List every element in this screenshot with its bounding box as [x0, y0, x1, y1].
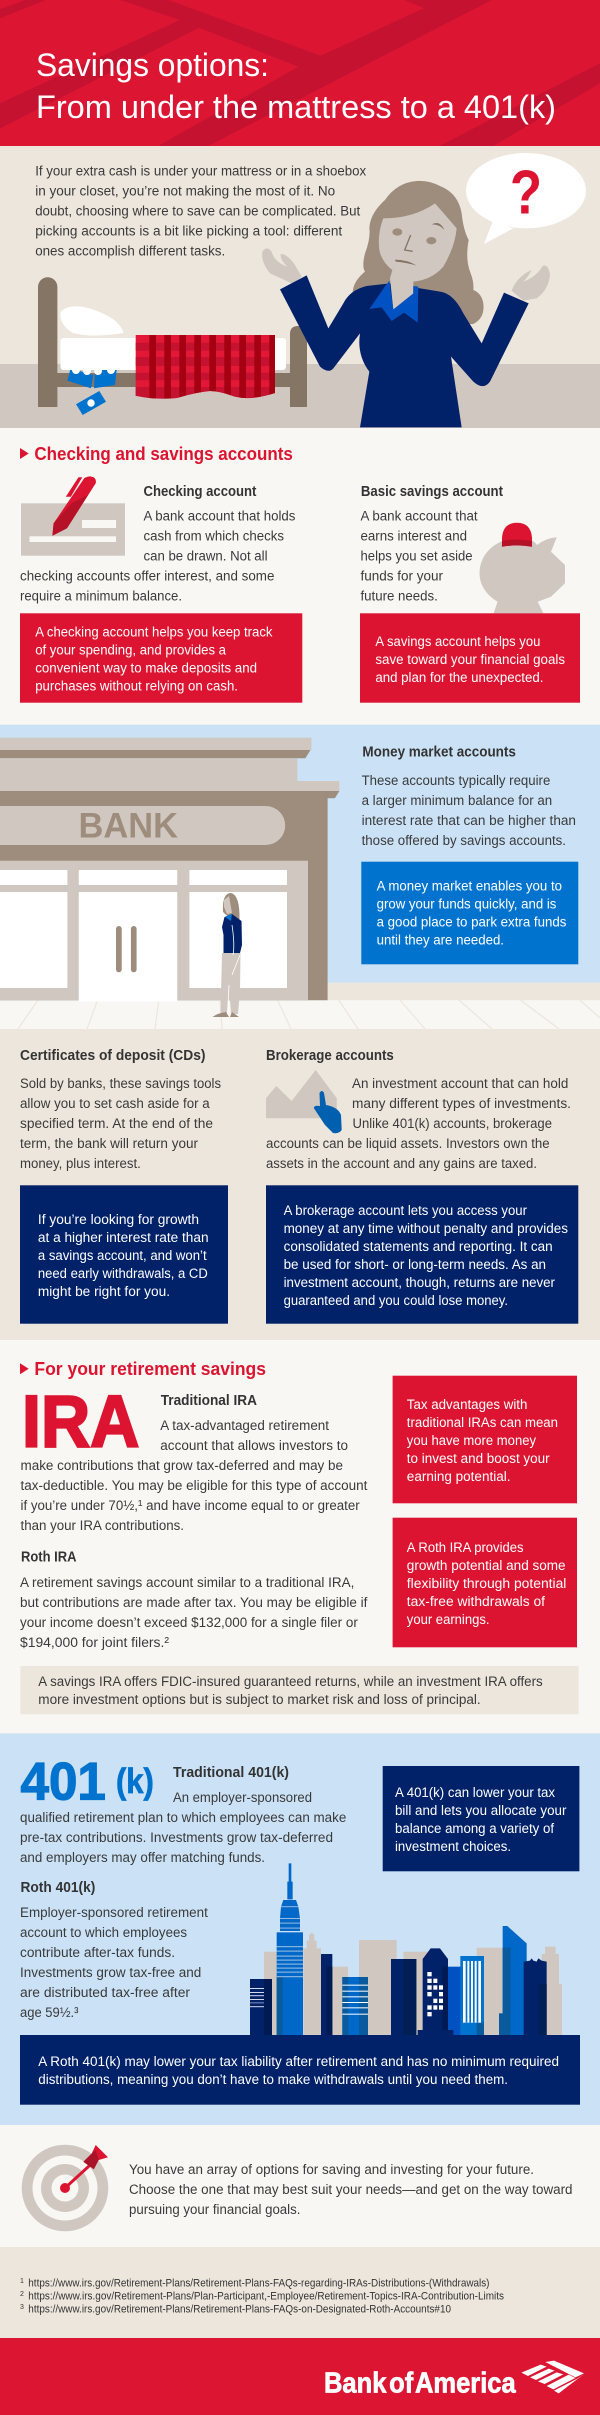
callout: traditional IRA: traditional IRAs can mean: [407, 1415, 558, 1431]
heading: traditional IRA: Traditional IRA: [161, 1393, 257, 1409]
intro text: If your extra cash is under your mattress or in a shoebox: [35, 164, 366, 180]
callout: consolidated statements and reporting. It can: [284, 1239, 553, 1255]
description: Roth 401(k): Investments grow tax-free and: [20, 1965, 201, 1981]
description: traditional IRA: make contributions that grow tax-deferred and may be: [20, 1458, 343, 1474]
panel: footnotes: https://www.irs.gov/Retirement-Plans/Retirement-Plans-FAQs-regarding-IRAs-Distributions-(Withdrawals): [28, 2278, 490, 2290]
description: Sold by banks, these savings tools: [20, 1076, 221, 1092]
description: require a minimum balance.: [20, 589, 182, 605]
description: traditional IRA: than your IRA contributions.: [20, 1518, 184, 1534]
panel: basic savings account: [360, 484, 580, 703]
panel: footnotes: 1: [20, 2278, 24, 2285]
callout: A savings account helps you: [375, 634, 540, 650]
description: [266, 1076, 571, 1172]
description: cash from which checks: [144, 529, 284, 545]
icon: flag mark: [521, 2361, 584, 2393]
description: those offered by savings accounts.: [362, 833, 566, 849]
panel: footnotes: [0, 2247, 600, 2338]
callout: traditional IRA: [393, 1376, 577, 1503]
panel: intro scene: [0, 146, 600, 428]
description: Unlike 401(k) accounts, brokerage: [352, 1116, 552, 1132]
description: [362, 773, 576, 849]
description: traditional 401(k): qualified retirement plan to which employees can make: [20, 1810, 346, 1826]
illustration: bank building: [0, 738, 339, 1002]
callout: If you’re looking for growth: [38, 1212, 199, 1228]
intro text: doubt, choosing where to save can be complicated. But: [35, 204, 360, 220]
heading: Checking account: [144, 484, 257, 500]
description: traditional IRA: [20, 1418, 367, 1534]
description: interest rate that can be higher than: [362, 813, 576, 829]
callout: a good place to park extra funds: [377, 915, 566, 931]
callout: purchases without relying on cash.: [35, 679, 238, 695]
callout: traditional IRA: you have more money: [407, 1433, 537, 1449]
description: An investment account that can hold: [352, 1076, 568, 1092]
callout: Roth 401(k): A Roth 401(k) may lower your tax liability after retirement and has no minimum required: [38, 2054, 559, 2070]
callout: A money market enables you to: [377, 879, 562, 895]
heading: Money market accounts: [362, 745, 516, 761]
heading: Basic savings account: [361, 484, 503, 500]
callout: traditional IRA: to invest and boost your: [407, 1451, 550, 1467]
description: traditional 401(k): pre-tax contributions. Investments grow tax-deferred: [20, 1830, 333, 1846]
bed illustration: [38, 277, 307, 415]
callout: traditional IRA: earning potential.: [407, 1469, 510, 1485]
description: Roth 401(k): account to which employees: [20, 1925, 187, 1941]
description: many different types of investments.: [352, 1096, 571, 1112]
description: traditional 401(k): and employers may offer matching funds.: [20, 1850, 265, 1866]
callout: [20, 613, 302, 703]
callout: convenient way to make deposits and: [35, 661, 257, 677]
icon: check and pen: [21, 476, 125, 556]
panel: checking account: [20, 476, 302, 703]
callout: Roth IRA: growth potential and some: [407, 1558, 566, 1574]
icon: mountain chart and pointing hand: [266, 1070, 342, 1133]
callout: 401(k): balance among a variety of: [395, 1821, 554, 1837]
note: savings vs investment IRA: [20, 1666, 579, 1714]
description: traditional 401(k): An employer-sponsored: [173, 1790, 312, 1806]
callout: investment account, though, returns are never: [284, 1275, 555, 1291]
description: [20, 509, 295, 605]
note: savings vs investment IRA: more investment options but is subject to market risk and loss of principal.: [38, 1692, 481, 1708]
intro text: [35, 164, 366, 260]
description: traditional IRA: A tax-advantaged retirement: [160, 1418, 329, 1434]
callout: [266, 1185, 578, 1324]
callout: guaranteed and you could lose money.: [284, 1293, 508, 1309]
panel: footnotes: 2: [20, 2291, 24, 2298]
callout: Roth IRA: your earnings.: [407, 1612, 490, 1628]
heading: Roth 401(k): Roth 401(k): [20, 1880, 95, 1896]
heading: traditional 401(k): Traditional 401(k): [173, 1765, 289, 1781]
intro text: in your closet, you’re not making the most of it. No: [35, 184, 335, 200]
description: helps you set aside: [360, 549, 473, 565]
speech bubble with question mark: [466, 153, 586, 244]
section heading: checking and savings: Checking and savings accounts: [34, 443, 293, 464]
speech bubble with question mark: ?: [510, 158, 542, 227]
description: assets in the account and any gains are taxed.: [266, 1156, 537, 1172]
description: funds for your: [360, 569, 443, 585]
401(k) wordmark: [20, 1752, 154, 1812]
callout: until they are needed.: [377, 933, 504, 949]
description: traditional IRA: account that allows investors to: [160, 1438, 348, 1454]
title: Savings options:: [36, 47, 269, 83]
description: specified term. At the end of the: [20, 1116, 213, 1132]
description: [20, 1076, 221, 1172]
logo: Bank of America: [324, 2361, 584, 2399]
logo: Bank of America: Bank of America: [324, 2367, 516, 2399]
callout: 401(k): A 401(k) can lower your tax: [395, 1785, 555, 1801]
footer: [0, 2338, 600, 2415]
callout: [361, 862, 578, 964]
callout: [360, 613, 580, 703]
callout: A brokerage account lets you access your: [284, 1203, 527, 1219]
heading: Certificates of deposit (CDs): [20, 1048, 206, 1064]
description: traditional IRA: tax-deductible. You may be eligible for this type of account: [20, 1478, 367, 1494]
panel: certificates of deposit: [20, 1048, 228, 1324]
panel: footnotes: https://www.irs.gov/Retirement-Plans/Plan-Participant,-Employee/Retirement-Topics-IRA-Contribution-Limits: [28, 2291, 504, 2303]
illustration: woman at the bank: [212, 893, 242, 1017]
section heading: retirement savings: For your retirement savings: [34, 1358, 266, 1379]
panel: closing message: [22, 2145, 572, 2231]
description: [360, 509, 478, 605]
blanket: [135, 335, 276, 405]
description: earns interest and: [360, 529, 467, 545]
description: These accounts typically require: [362, 773, 550, 789]
description: Roth 401(k): Employer-sponsored retirement: [20, 1905, 208, 1921]
callout: save toward your financial goals: [375, 652, 565, 668]
callout: 401(k): [383, 1766, 579, 1871]
callout: be used for short- or long-term needs. As an: [284, 1257, 546, 1273]
description: Roth IRA: $194,000 for joint filers.²: [20, 1635, 169, 1651]
description: can be drawn. Not all: [144, 549, 268, 565]
callout: traditional IRA: Tax advantages with: [407, 1397, 527, 1413]
callout: need early withdrawals, a CD: [38, 1266, 208, 1282]
icon: piggy bank: [480, 523, 565, 613]
closing text: [129, 2162, 572, 2218]
callout: [20, 1185, 228, 1324]
closing text: You have an array of options for saving and investing for your future.: [129, 2162, 534, 2178]
callout: Roth IRA: tax-free withdrawals of: [407, 1594, 545, 1610]
callout: grow your funds quickly, and is: [377, 897, 556, 913]
closing text: Choose the one that may best suit your needs—and get on the way toward: [129, 2182, 572, 2198]
callout: Roth 401(k): distributions, meaning you don’t have to make withdrawals until you need them.: [38, 2072, 508, 2088]
icon: cash under the mattress: [67, 366, 117, 415]
description: money, plus interest.: [20, 1156, 141, 1172]
description: a larger minimum balance for an: [362, 793, 552, 809]
callout: might be right for you.: [38, 1284, 170, 1300]
401(k) wordmark: 401: [20, 1752, 106, 1812]
description: future needs.: [360, 589, 438, 605]
callout: A checking account helps you keep track: [35, 625, 273, 641]
panel: 401(k): [0, 1733, 600, 2125]
header banner: [0, 0, 600, 146]
IRA wordmark: IRA: [22, 1382, 139, 1463]
description: Roth IRA: your income doesn’t exceed $132,000 for a single filer or: [20, 1615, 358, 1631]
401(k) wordmark: (k): [116, 1762, 154, 1801]
callout: Roth IRA: [393, 1518, 577, 1647]
panel: money market: [0, 725, 600, 1029]
callout: and plan for the unexpected.: [375, 670, 543, 686]
illustration: city skyline: [250, 1863, 562, 2035]
callout: 401(k): bill and lets you allocate your: [395, 1803, 567, 1819]
description: traditional 401(k): [20, 1790, 346, 1866]
callout: Roth IRA: flexibility through potential: [407, 1576, 566, 1592]
bank sign: BANK: [78, 806, 178, 845]
intro text: ones accomplish different tasks.: [35, 244, 225, 260]
heading: Roth IRA: Roth IRA: [21, 1550, 77, 1566]
note: savings vs investment IRA: A savings IRA offers FDIC-insured guaranteed returns, while an investment IRA offers: [38, 1674, 543, 1690]
illustration: shrugging woman: [262, 153, 586, 427]
title: [36, 47, 556, 125]
callout: a savings account, and won’t: [38, 1248, 207, 1264]
callout: of your spending, and provides a: [35, 643, 226, 659]
callout: Roth IRA: A Roth IRA provides: [407, 1540, 524, 1556]
panel: footnotes: https://www.irs.gov/Retirement-Plans/Retirement-Plans-FAQs-on-Designated-Roth-Accounts#10: [28, 2304, 451, 2316]
panel: IRA: [20, 1376, 579, 1714]
panel: footnotes: 3: [20, 2304, 24, 2311]
description: Roth 401(k): age 59½.³: [20, 2005, 79, 2021]
description: Roth 401(k): are distributed tax-free after: [20, 1985, 190, 2001]
description: A bank account that: [360, 509, 478, 525]
description: A bank account that holds: [144, 509, 295, 525]
description: Roth IRA: [20, 1575, 367, 1651]
description: accounts can be liquid assets. Investors own the: [266, 1136, 550, 1152]
description: Roth 401(k): [20, 1905, 208, 2021]
title: From under the mattress to a 401(k): [36, 89, 556, 125]
description: Roth IRA: but contributions are made after tax. You may be eligible if: [20, 1595, 367, 1611]
callout: Roth 401(k): [20, 2035, 580, 2105]
description: allow you to set cash aside for a: [20, 1096, 210, 1112]
callout: money at any time without penalty and provides: [284, 1221, 568, 1237]
description: Roth IRA: A retirement savings account similar to a traditional IRA,: [20, 1575, 354, 1591]
callout: 401(k): investment choices.: [395, 1839, 511, 1855]
description: traditional IRA: if you’re under 70½,¹ and have income equal to or greater: [20, 1498, 360, 1514]
heading: Brokerage accounts: [266, 1048, 394, 1064]
description: checking accounts offer interest, and some: [20, 569, 275, 585]
icon: target and dart: [22, 2145, 108, 2231]
description: term, the bank will return your: [20, 1136, 198, 1152]
intro text: picking accounts is a bit like picking a tool: different: [35, 224, 342, 240]
callout: at a higher interest rate than: [38, 1230, 209, 1246]
panel: brokerage accounts: [266, 1048, 578, 1324]
description: Roth 401(k): contribute after-tax funds.: [20, 1945, 175, 1961]
closing text: pursuing your financial goals.: [129, 2202, 300, 2218]
